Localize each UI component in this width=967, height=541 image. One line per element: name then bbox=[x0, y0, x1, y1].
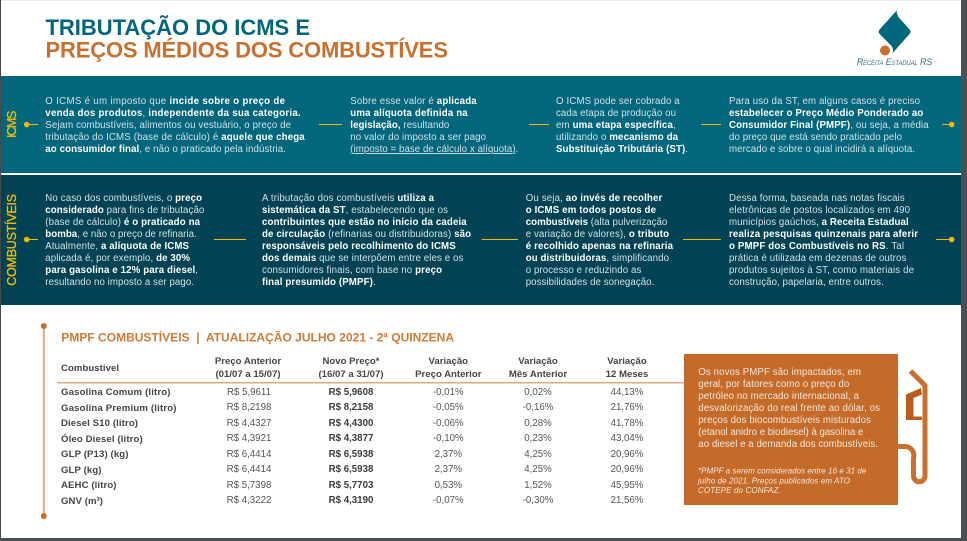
text: what ICMS is: venda dos produtos, independente da sua categoria. bbox=[45, 108, 301, 119]
text: state revenue surveys bbox=[729, 193, 918, 288]
text: applied rate: uma alíquota definida na bbox=[350, 108, 468, 119]
text: applied rate: Sobre esse valor é aplicada bbox=[350, 96, 477, 107]
row: AEHC: R$ 5,7398 bbox=[227, 480, 271, 491]
row: Óleo Diesel: 0,23% bbox=[524, 433, 552, 444]
text: state revenue surveys: Dessa forma, baseada nas notas fiscais bbox=[729, 193, 905, 204]
row: GNV: -0,30% bbox=[523, 495, 554, 506]
table header: (16/07 a 31/07) bbox=[318, 369, 384, 380]
table header: Mês Anterior bbox=[509, 369, 567, 380]
table header: Novo Preço* bbox=[322, 356, 380, 367]
panel: ICMS bbox=[0, 76, 961, 173]
row: GLP kg: 4,25% bbox=[524, 464, 552, 475]
row: Óleo Diesel: -0,10% bbox=[433, 433, 464, 444]
table: PMPF prices bbox=[57, 356, 684, 507]
row: GNV: R$ 4,3222 bbox=[227, 495, 271, 506]
text: refinery collection: possibilidades de sonegação. bbox=[526, 277, 654, 288]
text: what ICMS is: ao consumidor final, e não o praticado pela indústria. bbox=[45, 144, 286, 155]
callout text: desvalorização do real frente ao dólar, os bbox=[698, 403, 880, 414]
text: PMPF definition: Para uso da ST, em alguns casos é preciso bbox=[729, 96, 920, 107]
row: GLP P13: 4,25% bbox=[524, 449, 552, 460]
row: Óleo Diesel: Óleo Diesel (litro) bbox=[61, 433, 143, 445]
text: refinery collection: e variação de valores), o tributo bbox=[526, 229, 669, 240]
text: state revenue surveys: produtos sujeitos à ST, como materiais de bbox=[729, 265, 914, 276]
text: state revenue surveys: o PMPF dos Combustíveis no RS. Tal bbox=[729, 241, 904, 252]
row: AEHC: R$ 5,7703 bbox=[329, 480, 374, 491]
row: Gasolina Comum: R$ 5,9611 bbox=[227, 387, 271, 398]
connectors: Combustíveis row bbox=[24, 237, 954, 242]
table header bbox=[57, 356, 684, 384]
row: GLP P13: GLP (P13) (kg) bbox=[61, 449, 128, 460]
row: Gasolina Comum bbox=[61, 387, 644, 398]
callout: price drivers bbox=[684, 354, 898, 505]
table header: Variação bbox=[607, 356, 647, 367]
label: Combustíveis: COMBUSTÍVEIS bbox=[4, 194, 19, 286]
text: refinery collection: combustíveis (alta pulverização bbox=[526, 217, 667, 228]
row: GLP kg: R$ 6,5938 bbox=[329, 464, 374, 475]
text: ST system: responsáveis pelo recolhimento do ICMS bbox=[262, 241, 456, 252]
row: Gasolina Comum: R$ 5,9608 bbox=[329, 387, 374, 398]
label: ICMS: ICMS bbox=[5, 111, 19, 138]
row: GLP kg: 20,96% bbox=[611, 464, 644, 475]
text: PMPF definition: Consumidor Final (PMPF), ou seja, a média bbox=[729, 120, 929, 131]
text: state revenue surveys: eletrônicas de postos localizados em 490 bbox=[729, 205, 911, 216]
text: applied rate: legislação, resultando bbox=[350, 120, 449, 131]
footnote: julho de 2021. Preços publicados em ATO bbox=[697, 476, 850, 486]
text: ST system: sistemática da ST, estabelecendo que os bbox=[262, 205, 448, 216]
row: Diesel S10: Diesel S10 (litro) bbox=[61, 418, 138, 429]
text: collection stages: Substituição Tributária (ST). bbox=[556, 144, 688, 155]
row: Diesel S10: -0,06% bbox=[433, 418, 464, 429]
text: ST system: final presumido (PMPF). bbox=[262, 277, 376, 288]
row: Óleo Diesel: R$ 4,3921 bbox=[227, 433, 271, 444]
text: state revenue surveys: municípios gaúchos, a Receita Estadual bbox=[729, 217, 909, 228]
row: GLP kg bbox=[61, 464, 644, 476]
text: ST system: de circulação (refinarias ou distribuidoras) são bbox=[262, 229, 471, 240]
row: GLP P13: R$ 6,5938 bbox=[329, 449, 374, 460]
icon: fuel pump nozzle bbox=[898, 371, 925, 482]
row: Gasolina Premium: -0,05% bbox=[433, 402, 464, 413]
text: refinery collection: o ICMS em todos postos de bbox=[526, 205, 657, 216]
row: AEHC bbox=[61, 480, 644, 491]
text: PMPF definition: mercado e sobre o qual incidirá a alíquota. bbox=[729, 144, 915, 155]
row: Gasolina Comum: 0,02% bbox=[524, 387, 552, 398]
text: price considered: (base de cálculo) é o praticado na bbox=[45, 217, 201, 228]
row: GNV: R$ 4,3190 bbox=[329, 495, 373, 506]
text: refinery collection: ou distribuidoras, simplificando bbox=[526, 253, 669, 264]
panel: Combustíveis bbox=[0, 175, 961, 305]
connectors: ICMS row bbox=[24, 122, 954, 127]
row: Diesel S10: 0,28% bbox=[524, 418, 552, 429]
callout text bbox=[698, 367, 880, 450]
callout text: (etanol anidro e biodiesel) à gasolina e bbox=[698, 427, 863, 438]
row: Gasolina Comum: -0,01% bbox=[433, 387, 464, 398]
title bbox=[46, 15, 448, 62]
row: Diesel S10: 41,78% bbox=[611, 418, 644, 429]
table header: Preço Anterior bbox=[215, 356, 281, 367]
text: ST system: contribuintes que estão no início da cadeia bbox=[262, 217, 467, 228]
row: GLP P13: R$ 6,4414 bbox=[227, 449, 272, 460]
text: price considered: resultando no imposto a ser pago. bbox=[45, 277, 194, 288]
text: what ICMS is: O ICMS é um imposto que incide sobre o preço de bbox=[45, 96, 286, 107]
row: GLP P13: 2,37% bbox=[435, 449, 462, 460]
text: ST system: consumidores finais, com base no preço bbox=[262, 265, 442, 276]
row: Gasolina Premium: -0,16% bbox=[523, 402, 554, 413]
logo: Receita Estadual RS: Receita Estadual RS bbox=[857, 57, 932, 67]
timeline bar bbox=[41, 323, 47, 519]
text: collection stages: utilizando o mecanismo da bbox=[556, 132, 679, 143]
callout text: ao diesel e a demanda dos combustíveis. bbox=[698, 439, 878, 450]
row: Óleo Diesel: R$ 4,3877 bbox=[329, 433, 373, 444]
row: Gasolina Premium: Gasolina Premium (litro) bbox=[61, 403, 176, 414]
table header: Preço Anterior bbox=[415, 369, 482, 380]
text: applied rate: (imposto = base de cálculo x alíquota). bbox=[350, 144, 518, 155]
table header: 12 Meses bbox=[606, 369, 648, 380]
footnote: COTEPE do CONFAZ. bbox=[698, 486, 781, 495]
row: GLP kg: R$ 6,4414 bbox=[227, 464, 272, 475]
text: ST system: A tributação dos combustíveis utiliza a bbox=[262, 193, 435, 204]
text: applied rate bbox=[350, 96, 518, 155]
title: PREÇOS MÉDIOS DOS COMBUSTÍVES bbox=[46, 37, 448, 62]
text: PMPF definition: do preço que está sendo praticado pelo bbox=[729, 132, 902, 143]
table header: Variação bbox=[518, 356, 558, 367]
text: ST system: dos demais que se interpõem entre eles e os bbox=[262, 253, 463, 264]
title: TRIBUTAÇÃO DO ICMS E bbox=[46, 15, 310, 40]
text: refinery collection: é recolhido apenas na refinaria bbox=[526, 241, 674, 252]
text: state revenue surveys: construção, papelaria, entre outros. bbox=[729, 277, 884, 288]
text: ST system bbox=[262, 193, 471, 288]
row: GNV: 21,56% bbox=[611, 495, 644, 506]
table header: Variação bbox=[429, 356, 468, 367]
text: PMPF definition bbox=[729, 96, 929, 155]
text: refinery collection bbox=[526, 193, 674, 288]
text: what ICMS is bbox=[45, 96, 305, 155]
text: collection stages: cada etapa de produção ou bbox=[556, 108, 676, 119]
row: GNV: GNV (m³) bbox=[61, 496, 103, 507]
text: PMPF definition: estabelecer o Preço Médio Ponderado ao bbox=[729, 108, 923, 119]
row: Óleo Diesel: 43,04% bbox=[611, 433, 644, 444]
row: Diesel S10: R$ 4,4300 bbox=[329, 418, 373, 429]
row: Diesel S10: R$ 4,4327 bbox=[227, 418, 271, 429]
row: AEHC: 45,95% bbox=[611, 480, 644, 491]
row: GLP kg: GLP (kg) bbox=[61, 465, 102, 476]
row: GNV: -0,07% bbox=[433, 495, 464, 506]
text: what ICMS is: tributação do ICMS (base de cálculo) é aquele que chega bbox=[45, 132, 305, 143]
row: AEHC: 1,52% bbox=[524, 480, 552, 491]
row: AEHC: 0,53% bbox=[435, 480, 462, 491]
text: collection stages: O ICMS pode ser cobrado a bbox=[556, 96, 680, 107]
text: price considered: bomba, e não o preço de refinaria. bbox=[45, 229, 197, 240]
row: Gasolina Premium: R$ 8,2198 bbox=[227, 402, 271, 413]
text: state revenue surveys: prática é utilizada em dezenas de outros bbox=[729, 253, 906, 264]
callout text: preços dos biocombustíveis misturados bbox=[698, 415, 871, 426]
text: price considered: Atualmente, a alíquota de ICMS bbox=[45, 241, 190, 252]
row: GLP P13 bbox=[61, 449, 644, 460]
table header: Combustível bbox=[61, 363, 119, 374]
text: applied rate: no valor do imposto a ser pago bbox=[350, 132, 486, 143]
text: what ICMS is: Sejam combustíveis, alimentos ou vestuário, o preço de bbox=[45, 120, 291, 131]
row: Gasolina Comum: Gasolina Comum (litro) bbox=[61, 387, 170, 398]
heading: PMPF section: PMPF COMBUSTÍVEIS | ATUALIZAÇÃO JULHO 2021 - 2ª QUINZENA bbox=[61, 329, 454, 344]
text: refinery collection: o processo e reduzindo as bbox=[526, 265, 641, 276]
row: GLP P13: 20,96% bbox=[611, 449, 644, 460]
text: state revenue surveys: realiza pesquisas quinzenais para aferir bbox=[729, 229, 918, 240]
text: price considered: considerado para fins de tributação bbox=[45, 205, 204, 216]
callout text: petróleo no mercado internacional, a bbox=[698, 391, 860, 402]
text: price considered: aplicada é, por exemplo, de 30% bbox=[45, 253, 190, 264]
text: refinery collection: Ou seja, ao invés de recolher bbox=[526, 193, 663, 204]
logo: Receita Estadual RS bbox=[857, 10, 932, 67]
row: Óleo Diesel bbox=[61, 433, 644, 445]
callout text: Os novos PMPF são impactados, em bbox=[698, 367, 861, 378]
footnote bbox=[697, 466, 867, 495]
text: price considered: para gasolina e 12% para diesel, bbox=[45, 265, 198, 276]
callout text: geral, por fatores como o preço do bbox=[698, 379, 849, 390]
row: Gasolina Premium bbox=[61, 402, 644, 414]
row: Gasolina Premium: 21,76% bbox=[611, 402, 644, 413]
text: collection stages: em uma etapa específica, bbox=[556, 120, 676, 131]
text: price considered bbox=[45, 193, 204, 288]
footnote: *PMPF a serem considerados entre 16 e 31 de bbox=[698, 466, 867, 475]
row: GLP kg: 2,37% bbox=[435, 464, 462, 475]
row: Gasolina Comum: 44,13% bbox=[611, 387, 644, 398]
text: collection stages bbox=[556, 96, 688, 155]
table header: (01/07 a 15/07) bbox=[215, 369, 281, 380]
text: price considered: No caso dos combustíveis, o preço bbox=[45, 193, 202, 204]
row: Gasolina Premium: R$ 8,2158 bbox=[329, 402, 374, 413]
row: GNV bbox=[61, 495, 644, 507]
row: Diesel S10 bbox=[61, 418, 644, 429]
row: AEHC: AEHC (litro) bbox=[61, 480, 116, 491]
